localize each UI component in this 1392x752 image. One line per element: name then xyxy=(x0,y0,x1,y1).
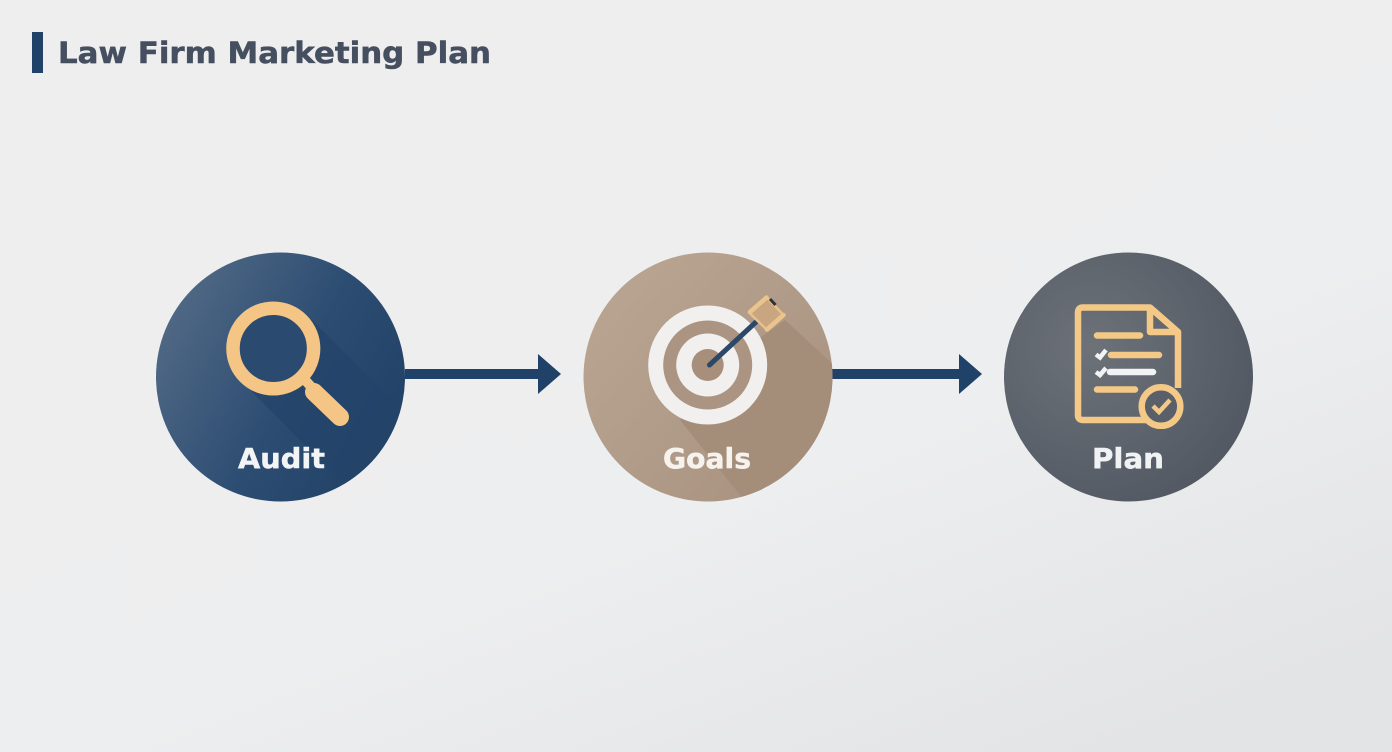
icon: checklist document xyxy=(1078,308,1180,426)
icon: target with arrow xyxy=(648,297,784,424)
arrow: audit to goals xyxy=(405,354,561,394)
label: audit: Audit xyxy=(238,442,325,475)
icon: magnifying glass xyxy=(233,308,340,417)
title: Law Firm Marketing Plan xyxy=(58,36,491,70)
panel: goals xyxy=(584,252,832,502)
panel: plan xyxy=(1004,252,1253,502)
icon: arrow flag xyxy=(749,297,784,330)
label: goals: Goals xyxy=(663,442,751,475)
arrow: goals to plan xyxy=(832,354,982,394)
panel: audit xyxy=(156,252,405,502)
label: plan: Plan xyxy=(1092,442,1164,475)
title accent bar xyxy=(32,32,43,73)
